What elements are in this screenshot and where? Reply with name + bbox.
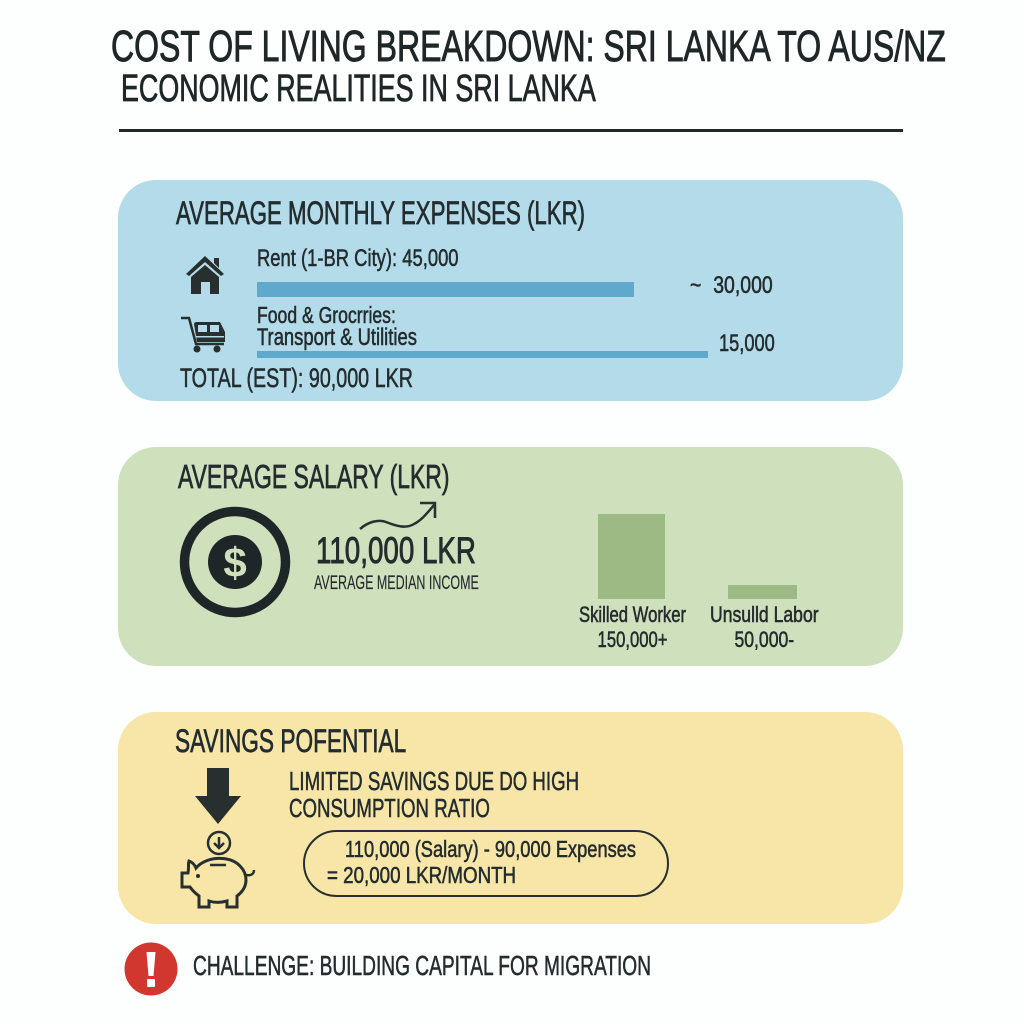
text: rent: Rent (1-BR City): 45,000 xyxy=(257,245,459,272)
callout: savings formula xyxy=(303,830,669,897)
label: unskilled labor: 50,000- xyxy=(734,627,794,652)
text: limited savings xyxy=(289,766,579,823)
bar: unskilled labor xyxy=(728,585,797,599)
icon: house xyxy=(186,256,224,294)
icon: dollar coin xyxy=(180,506,290,618)
text: transport and utilities: Transport & Utilities xyxy=(257,324,417,351)
text: limited savings: CONSUMPTION RATIO xyxy=(289,793,490,823)
label: skilled worker xyxy=(579,602,686,652)
icon: shopping cart xyxy=(181,316,225,352)
text: total: TOTAL (EST): 90,000 LKR xyxy=(180,363,413,393)
text: food and groceries: Food & Grocrries: xyxy=(257,302,396,328)
icon: alert xyxy=(124,942,178,996)
label: unskilled labor: Unsulld Labor xyxy=(710,602,819,627)
icon: trend arrow xyxy=(359,502,436,530)
text: challenge: CHALLENGE: BUILDING CAPITAL FOR MIGRATION xyxy=(193,950,651,981)
text: limited savings: LIMITED SAVINGS DUE DO HIGH xyxy=(289,766,579,796)
caption: median income: AVERAGE MEDIAN INCOME xyxy=(314,573,479,594)
label: skilled worker: 150,000+ xyxy=(598,627,667,652)
value: median income: 110,000 LKR xyxy=(316,530,476,571)
bar: rent xyxy=(257,282,634,297)
value: 30,000: ~ 30,000 xyxy=(690,272,773,299)
text: savings formula line 1: 110,000 (Salary) - 90,000 Expenses xyxy=(345,836,636,862)
text: savings formula line 2: = 20,000 LKR/MONTH xyxy=(327,862,516,888)
icon: dollar coin: $ xyxy=(223,539,247,586)
bar: transport xyxy=(257,351,708,358)
panel: average monthly expenses xyxy=(118,180,903,401)
title: COST OF LIVING BREAKDOWN: SRI LANKA TO AUS/NZ xyxy=(111,22,946,71)
panel: average salary xyxy=(118,447,903,666)
icon: piggy bank with coin xyxy=(180,830,256,908)
icon: down arrow xyxy=(195,768,241,824)
bar: skilled worker xyxy=(598,514,665,599)
value: 15,000: 15,000 xyxy=(719,330,775,357)
heading: savings: SAVINGS POFENTIAL xyxy=(175,723,406,759)
heading: salary: AVERAGE SALARY (LKR) xyxy=(178,458,450,495)
label: unskilled labor xyxy=(710,602,819,652)
label: skilled worker: Skilled Worker xyxy=(579,602,686,627)
panel: savings potential xyxy=(118,712,903,924)
subtitle: ECONOMIC REALITIES IN SRI LANKA xyxy=(121,68,596,110)
heading: expenses: AVERAGE MONTHLY EXPENSES (LKR) xyxy=(176,195,585,231)
